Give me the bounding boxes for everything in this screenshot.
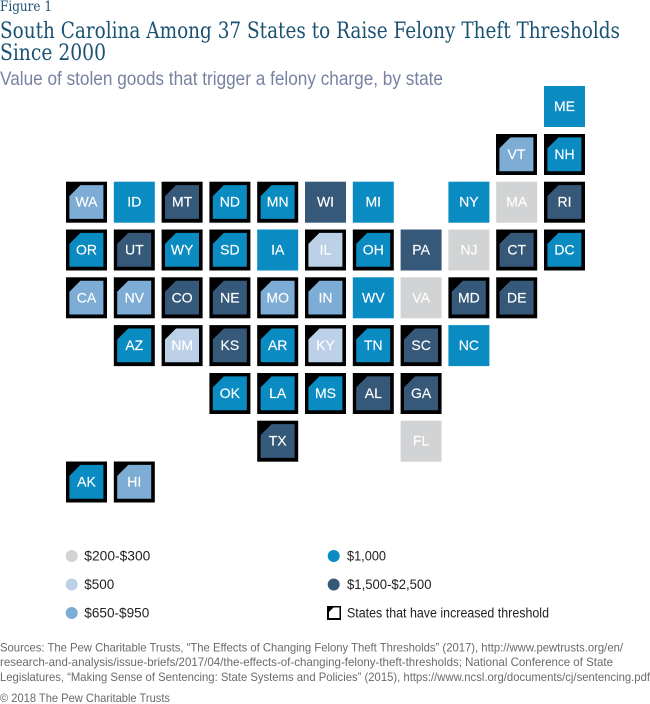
state: DC (544, 230, 585, 270)
state: LA: LA (269, 385, 287, 401)
state: NV: NV (125, 289, 145, 305)
title: Since 2000 (0, 41, 106, 66)
state: MN (257, 182, 298, 223)
state: AZ (114, 325, 155, 366)
state: NE (209, 277, 250, 318)
state: NV (114, 277, 155, 318)
state: MO: MO (266, 289, 289, 305)
state: AZ: AZ (125, 337, 144, 353)
state: PA (401, 230, 442, 270)
state: RI: RI (558, 194, 572, 210)
state: PA: PA (412, 242, 431, 258)
state: OK: OK (220, 385, 241, 401)
state: VA: VA (412, 289, 431, 305)
state: FL (401, 421, 442, 462)
legend item: $650-$950: $650-$950 (84, 606, 149, 620)
state: CT: CT (507, 242, 526, 258)
state: TN (353, 325, 394, 366)
state: TX (257, 421, 298, 462)
state: VT: VT (508, 146, 526, 162)
state: MT (162, 182, 203, 223)
legend item: $1,000: $1,000 (347, 549, 386, 564)
state: AL (353, 373, 394, 414)
state: WV (353, 277, 394, 318)
state: DC: DC (554, 242, 575, 258)
legend (66, 549, 549, 620)
state: ME: ME (554, 98, 575, 114)
sources: research-and-analysis/issue-briefs/2017/04/the-effects-of-changing-felony-theft-thresholds; National Conference of State (0, 655, 613, 669)
state: CT (496, 230, 537, 270)
state: GA (401, 373, 442, 414)
state: WY (162, 230, 203, 270)
state: ID (114, 182, 155, 223)
subtitle: Value of stolen goods that trigger a felony charge, by state (0, 68, 443, 90)
state: AK: AK (77, 474, 96, 490)
state: IA (257, 230, 298, 270)
legend item: $1,000 (328, 549, 386, 564)
state: DE: DE (507, 289, 526, 305)
state: ND: ND (220, 194, 240, 210)
state: ME (544, 86, 585, 127)
state: TN: TN (364, 337, 383, 353)
state: CO: CO (172, 289, 193, 305)
state: OR: OR (76, 242, 97, 258)
state: ND (209, 182, 250, 223)
state: UT (114, 230, 155, 270)
state: KY: KY (316, 337, 335, 353)
state: DE (496, 277, 537, 318)
state: IL (305, 230, 346, 270)
state: SD: SD (220, 242, 240, 258)
state: MD: MD (458, 289, 480, 305)
state: NE: NE (220, 289, 240, 305)
state: WV: WV (362, 289, 385, 305)
state: OH: OH (363, 242, 384, 258)
state: VT (496, 134, 537, 175)
state: NJ (448, 230, 489, 270)
state: WA: WA (75, 194, 98, 210)
state: MI: MI (366, 194, 381, 210)
state: NH (544, 134, 585, 175)
state: NC: NC (459, 337, 479, 353)
state: GA: GA (411, 385, 432, 401)
state: MS (305, 373, 346, 414)
state: LA (257, 373, 298, 414)
state: OR (66, 230, 107, 270)
state: FL: FL (413, 433, 429, 449)
state: RI (544, 182, 585, 223)
state: IA: IA (271, 242, 285, 258)
state: OK (209, 373, 250, 414)
state: CA (66, 277, 107, 318)
state: VA (401, 277, 442, 318)
state: AR: AR (268, 337, 287, 353)
state: MS: MS (315, 385, 336, 401)
state: NH: NH (554, 146, 575, 162)
state: AR (257, 325, 298, 366)
tile map of states (66, 86, 585, 502)
state: AL: AL (365, 385, 382, 401)
state: SC: SC (411, 337, 431, 353)
state: KS (209, 325, 250, 366)
state: IN: IN (318, 289, 332, 305)
legend item: $200-$300: $200-$300 (84, 549, 150, 564)
state: WI: WI (317, 194, 334, 210)
state: SD (209, 230, 250, 270)
state: MO (257, 277, 298, 318)
state: HI: HI (127, 474, 141, 490)
state: TX: TX (269, 433, 287, 449)
state: MN: MN (267, 194, 289, 210)
legend item: $500 (66, 577, 114, 592)
legend item: $500: $500 (84, 577, 114, 592)
state: WA (66, 182, 107, 223)
state: NY (448, 182, 489, 223)
state: HI (114, 462, 155, 502)
legend item: $1,500-$2,500: $1,500-$2,500 (347, 577, 432, 592)
state: IN (305, 277, 346, 318)
state: MT: MT (172, 194, 193, 210)
state: AK (66, 462, 107, 502)
state: NM (162, 325, 203, 366)
legend item: states that have increased threshold: States that have increased threshold (347, 606, 549, 620)
state: NM: NM (171, 337, 193, 353)
state: KS: KS (221, 337, 239, 353)
state: CO (162, 277, 203, 318)
state: MA (496, 182, 537, 223)
state: WI (305, 182, 346, 223)
state: NY: NY (459, 194, 479, 210)
state: SC (401, 325, 442, 366)
state: NC (448, 325, 489, 366)
sources: Sources: The Pew Charitable Trusts, “The Effects of Changing Felony Theft Thresholds” (2017), http://www.pewtrusts.org/en/ (0, 640, 624, 654)
state: UT: UT (125, 242, 144, 258)
state: MI (353, 182, 394, 223)
state: NJ: NJ (460, 242, 477, 258)
state: KY (305, 325, 346, 366)
state: WY: WY (171, 242, 194, 258)
state: MA: MA (506, 194, 528, 210)
state: IL: IL (320, 242, 332, 258)
state: MD (448, 277, 489, 318)
state: OH (353, 230, 394, 270)
state: ID: ID (127, 194, 141, 210)
state: CA: CA (77, 289, 97, 305)
